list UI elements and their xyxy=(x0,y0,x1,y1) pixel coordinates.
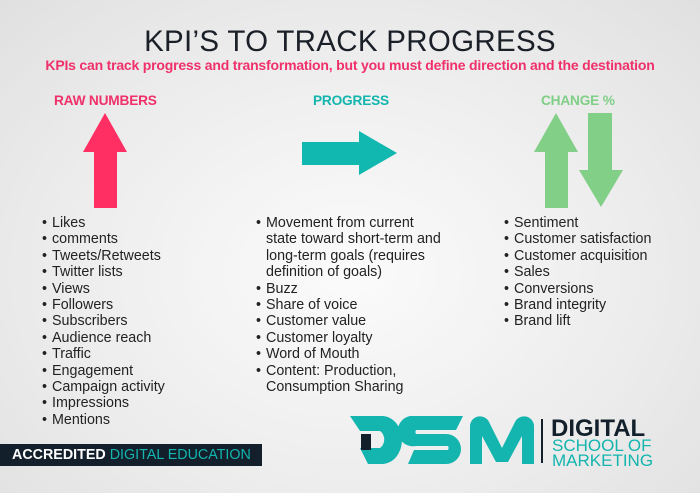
list: progress: definition of goals) xyxy=(266,264,382,280)
list: progress: Customer loyalty xyxy=(266,330,372,346)
list: raw numbers: Likes xyxy=(52,215,85,231)
list: raw numbers: Traffic xyxy=(52,346,91,362)
list: raw numbers: comments xyxy=(52,231,118,247)
list: progress: long-term goals (requires xyxy=(266,248,425,264)
list: progress xyxy=(256,215,441,395)
list: change: Brand lift xyxy=(514,313,570,329)
list: raw numbers: Engagement xyxy=(52,363,133,379)
list: raw numbers: Campaign activity xyxy=(52,379,165,395)
list: progress: Share of voice xyxy=(266,297,357,313)
list: change: Sales xyxy=(514,264,550,280)
logo: DSM: SCHOOL OF xyxy=(552,436,652,455)
heading: change %: CHANGE % xyxy=(541,93,615,108)
list: raw numbers: Subscribers xyxy=(52,313,128,329)
list: raw numbers: Twitter lists xyxy=(52,264,123,280)
subtitle: KPIs can track progress and transformation, but you must define direction and the destination xyxy=(45,57,655,73)
list: progress: Content: Production, xyxy=(266,363,396,379)
logo: DSM xyxy=(350,415,653,468)
list: progress: Customer value xyxy=(266,313,366,329)
heading: progress: PROGRESS xyxy=(313,93,389,108)
banner: accredited xyxy=(0,444,262,466)
heading: raw numbers: RAW NUMBERS xyxy=(54,93,157,108)
list: progress: Movement from current xyxy=(266,215,414,231)
icon: arrows xyxy=(83,113,623,208)
logo: DSM: DIGITAL xyxy=(551,415,645,442)
title: KPI’S TO TRACK PROGRESS xyxy=(144,25,556,58)
list: raw numbers: Mentions xyxy=(52,412,110,428)
list: change: Conversions xyxy=(514,281,593,297)
teal right arrow xyxy=(302,131,397,175)
list: progress: state toward short-term and xyxy=(266,231,441,247)
list: change: Sentiment xyxy=(514,215,578,231)
banner: accredited: ACCREDITED DIGITAL EDUCATION xyxy=(12,447,251,463)
list: raw numbers: Impressions xyxy=(52,395,129,411)
list: raw numbers xyxy=(42,215,165,428)
list: raw numbers: Audience reach xyxy=(52,330,151,346)
list: raw numbers: Tweets/Retweets xyxy=(52,248,161,264)
list: progress: Consumption Sharing xyxy=(266,379,404,395)
list: change: Customer satisfaction xyxy=(514,231,651,247)
list: change xyxy=(504,215,651,329)
pink up arrow xyxy=(83,113,127,208)
list: change: Customer acquisition xyxy=(514,248,648,264)
list: progress: Buzz xyxy=(266,281,298,297)
list: raw numbers: Views xyxy=(52,281,90,297)
list: raw numbers: Followers xyxy=(52,297,113,313)
green up/down arrows xyxy=(534,113,623,208)
list: progress: Word of Mouth xyxy=(266,346,360,362)
list: change: Brand integrity xyxy=(514,297,606,313)
